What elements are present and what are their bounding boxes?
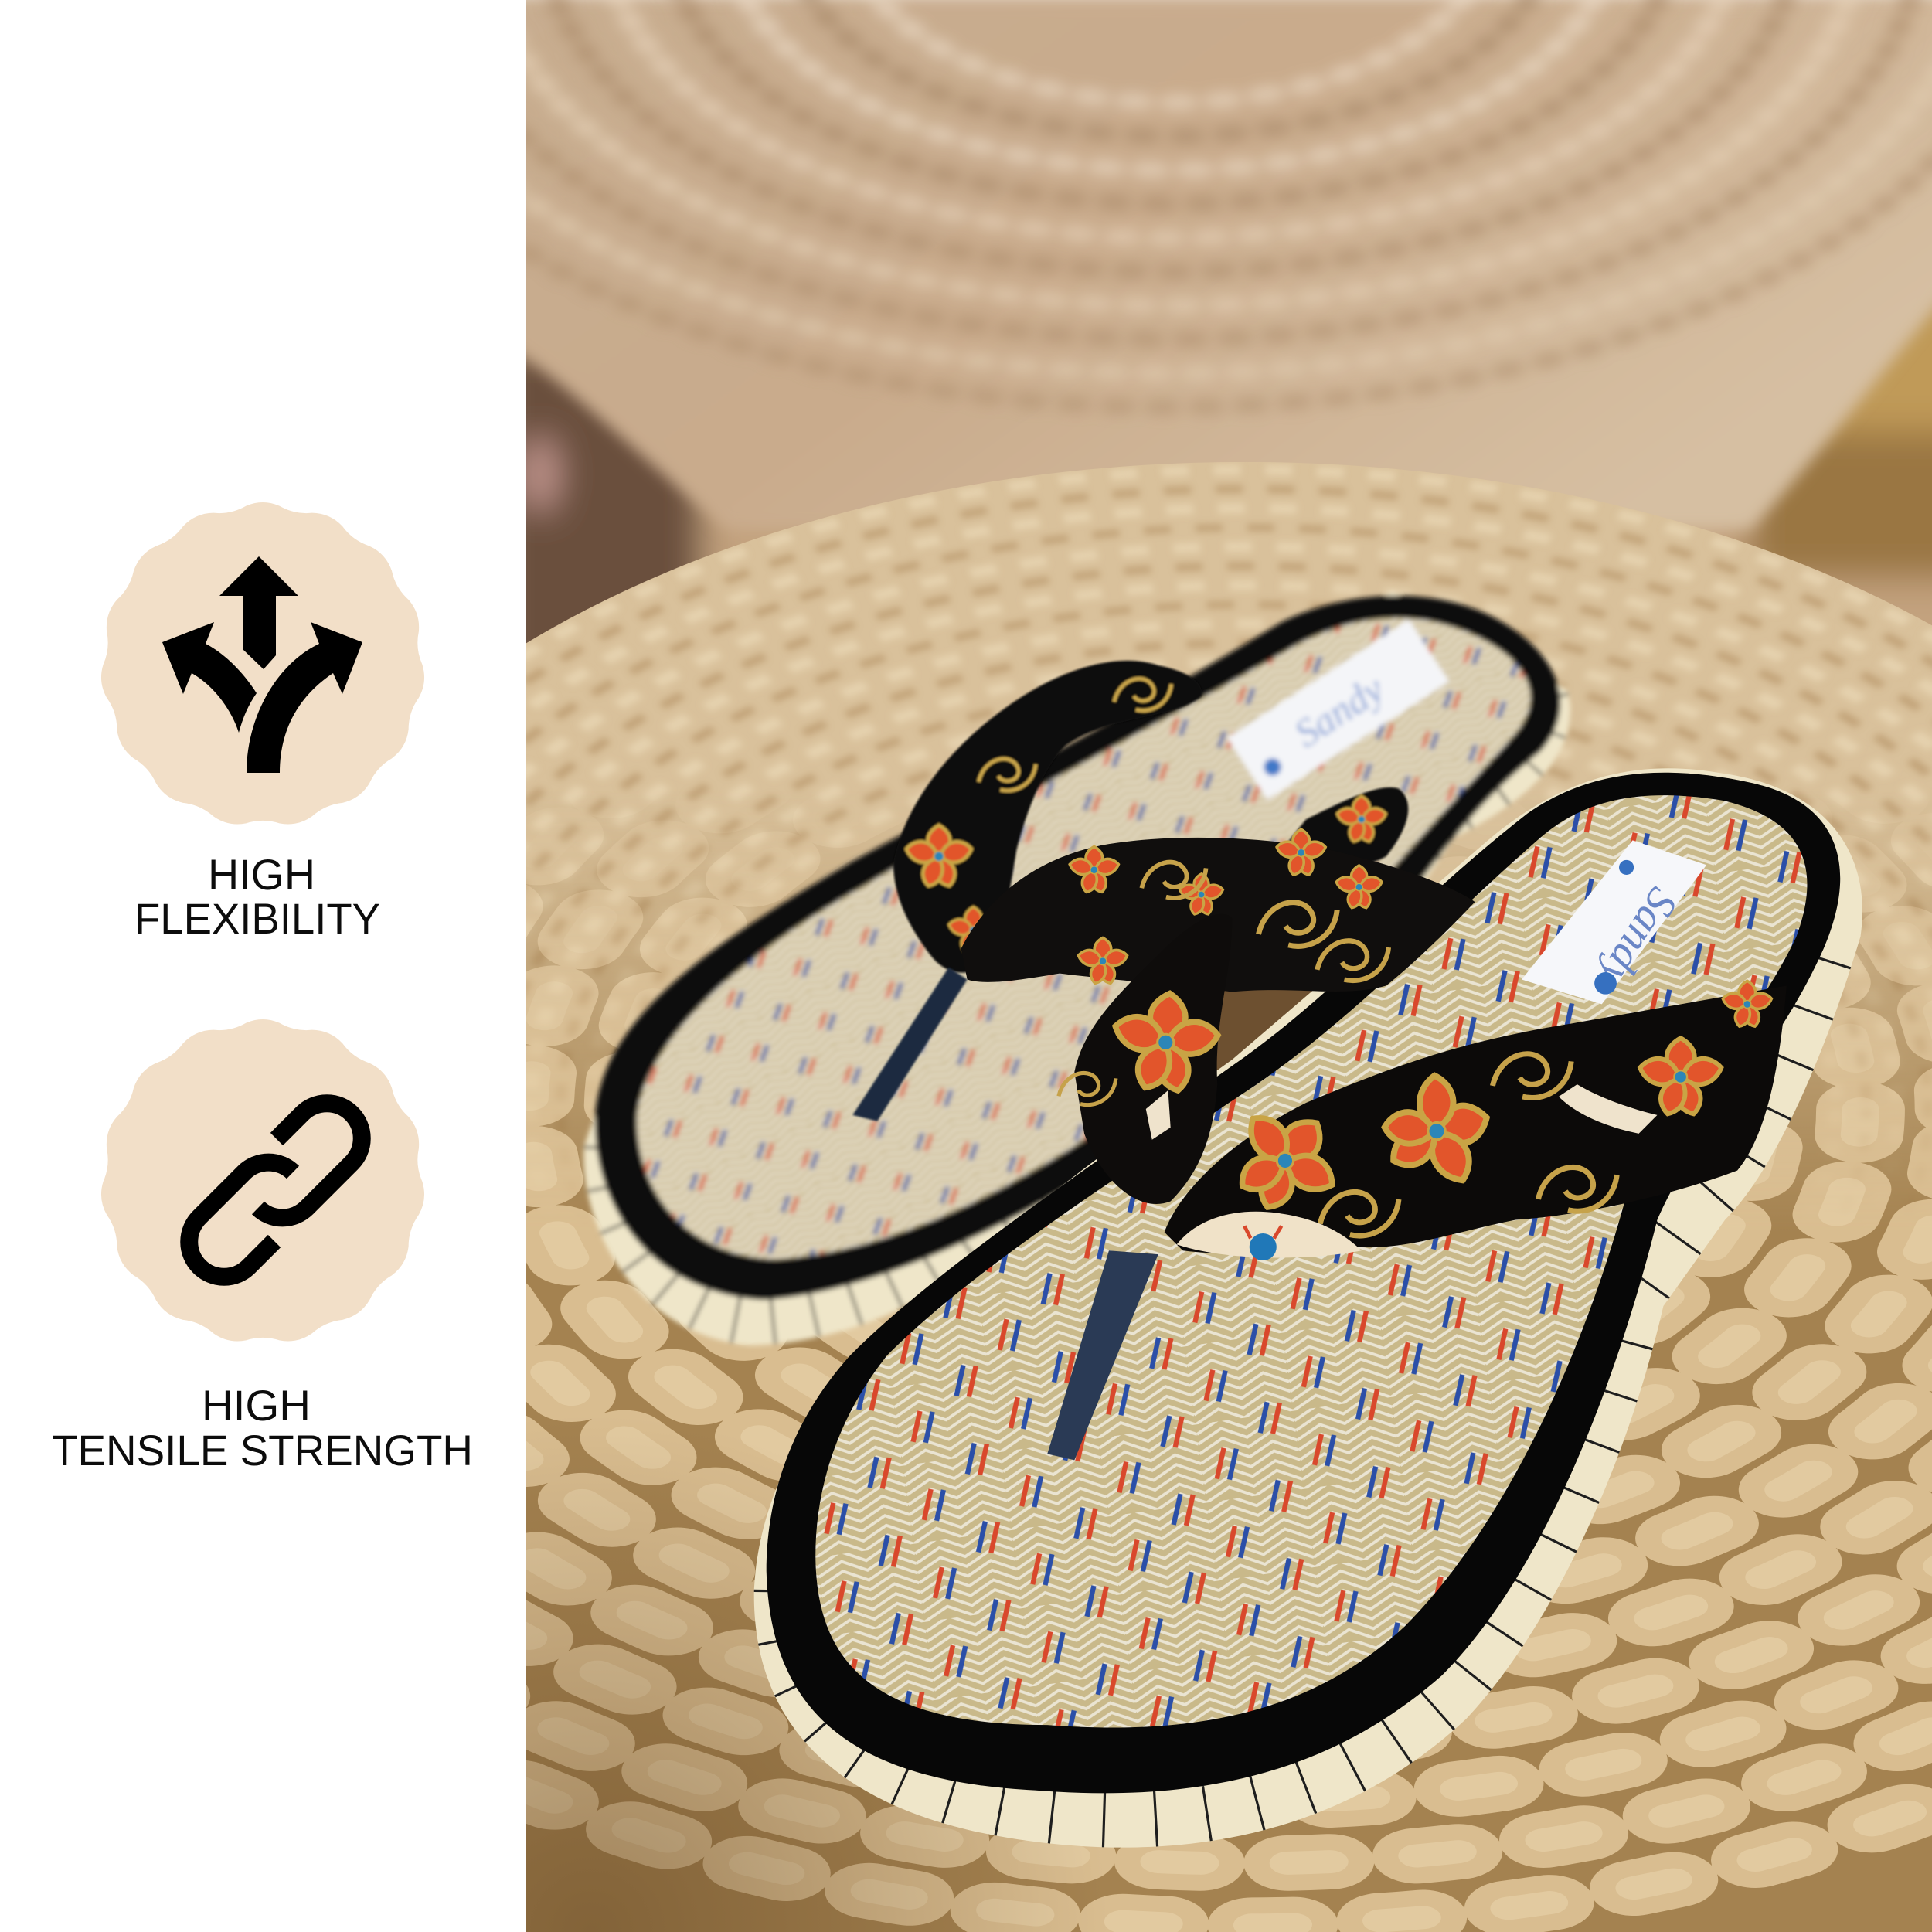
- back sandal brand label: Sandy: [1287, 667, 1392, 756]
- woven water hyacinth mat: [526, 462, 1932, 1932]
- label: high flexibility: FLEXIBILITY: [134, 894, 380, 943]
- blurred background behind hat: [493, 0, 1932, 740]
- front sandal woven insole: [815, 795, 1807, 1728]
- badge: scalloped beige background: [101, 502, 424, 824]
- badge: scalloped beige background: [101, 1019, 424, 1341]
- floral print: [1059, 829, 1771, 1260]
- label: high tensile strength: HIGH: [202, 1381, 311, 1430]
- front sandal black border: [767, 773, 1840, 1793]
- front sandal brand label: Sandy: [1589, 879, 1688, 998]
- back sandal thong post: [852, 968, 968, 1121]
- front sandal sole: [754, 768, 1862, 1848]
- shadow gap between straps: [1213, 974, 1393, 1109]
- photo panel: sandals on woven mat: [526, 0, 1932, 1932]
- back sandal black border: [595, 596, 1560, 1300]
- icon: three diverging arrows: [162, 556, 362, 773]
- back sandal strap: [893, 661, 1408, 973]
- label: high tensile strength: [52, 1381, 473, 1475]
- front sandal straps: [961, 829, 1787, 1260]
- back sandal sole: [583, 591, 1570, 1345]
- feature: high flexibility: [101, 502, 424, 943]
- main strap band: [1165, 986, 1787, 1254]
- front sandal: [754, 768, 1862, 1848]
- back sandal: [583, 591, 1570, 1345]
- label: high tensile strength: TENSILE STRENGTH: [52, 1426, 473, 1475]
- white blossom at toe knot: [1177, 1212, 1362, 1260]
- label: high flexibility: [134, 850, 380, 943]
- front sandal brand label: [1522, 840, 1706, 1004]
- front strap arm: [1074, 914, 1232, 1204]
- feature: high tensile strength: [52, 1019, 473, 1475]
- front sandal thong post: [1047, 1250, 1158, 1460]
- back sandal woven insole: [637, 618, 1530, 1259]
- label: high flexibility: HIGH: [208, 850, 315, 899]
- back sandal brand label: [1227, 620, 1449, 800]
- rear strap arm: [961, 838, 1475, 992]
- icon: chain link: [189, 1104, 362, 1277]
- left white panel: [0, 0, 526, 1932]
- straw hat: [526, 0, 1932, 536]
